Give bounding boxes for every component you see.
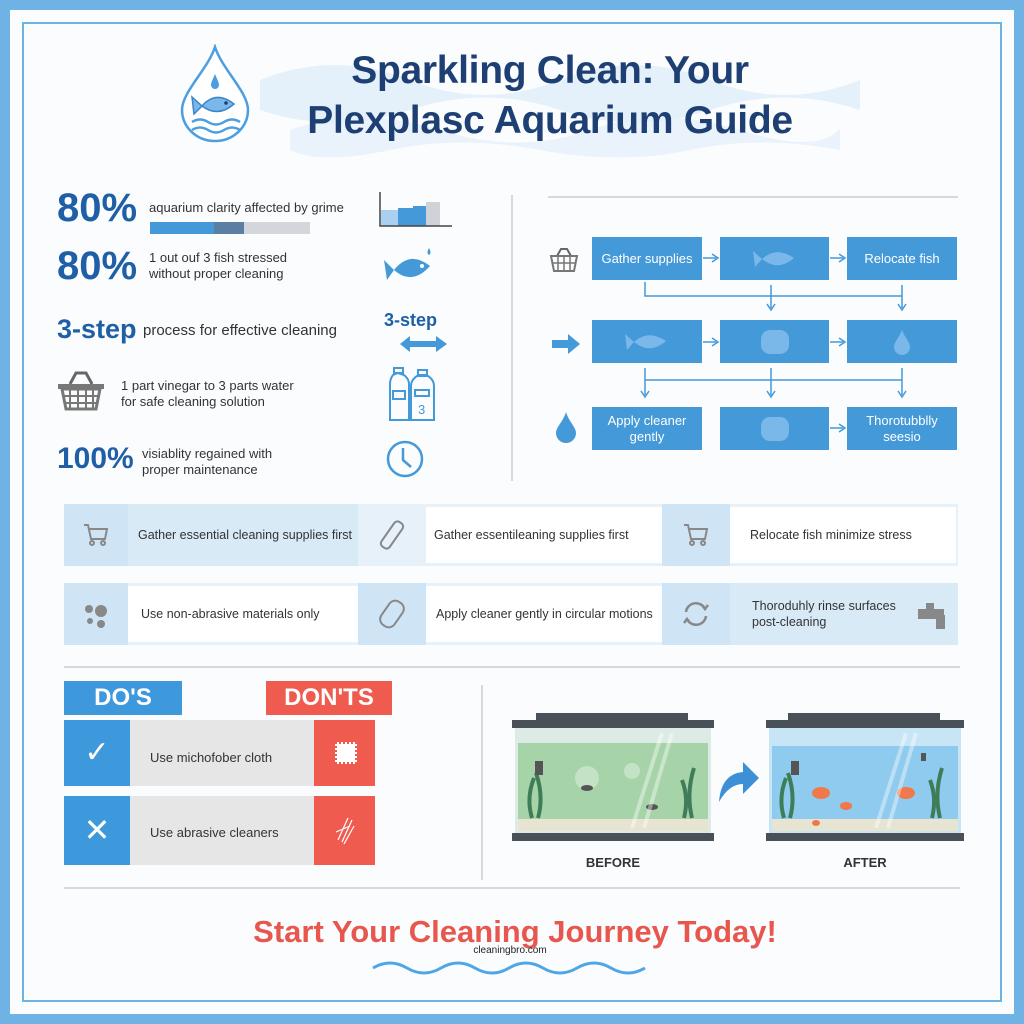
box: sponge 2 [720, 407, 829, 450]
stat: 100%: proper maintenance [142, 462, 258, 477]
panel: stats [57, 186, 344, 477]
flowchart [550, 237, 957, 450]
icon: refresh [662, 583, 730, 645]
stat: 3-step: 3-step [57, 314, 137, 344]
icon: 3-step arrow: 3-step [384, 310, 437, 330]
icon: bottles [389, 367, 435, 421]
box: gather supplies [592, 237, 702, 280]
icon: arrow [552, 334, 580, 354]
stat: 80% fish stressed [57, 244, 287, 288]
icon: fish [384, 248, 430, 280]
stat: 80% fish stressed: 80% [57, 244, 137, 288]
box: thoroughly [847, 407, 957, 450]
don'ts heading [266, 681, 392, 715]
panel: steps row 2: Thoroduhly rinse surfaces [752, 599, 896, 613]
connectors [640, 253, 907, 433]
stat: vinegar ratio: 1 part vinegar to 3 parts water [121, 378, 294, 393]
title background waves [260, 65, 860, 158]
decorative wave [372, 962, 646, 974]
panel: steps row 1: Relocate fish minimize stress [750, 528, 912, 542]
icon: dots [64, 583, 128, 645]
title: Sparkling Clean: Your [351, 49, 749, 92]
label: after: AFTER [843, 855, 887, 870]
icon: clock [386, 440, 424, 478]
icon: mini bar chart [379, 192, 452, 227]
do's heading: DO'S [94, 684, 152, 711]
box: apply cleaner: gently [630, 428, 664, 444]
stat: 100% [57, 442, 272, 477]
icon: basket [58, 372, 104, 410]
stat: 80% fish stressed: 1 out ouf 3 fish stressed [149, 250, 287, 265]
stat: 80% clarity: aquarium clarity affected by grime [149, 200, 344, 215]
box: sponge [720, 320, 829, 363]
arrow: before to after [719, 762, 759, 802]
box: gather supplies: Gather supplies [601, 250, 693, 266]
icon: sponge [358, 583, 426, 645]
icon: cart 2 [662, 504, 730, 566]
footer url: cleaningbro.com [473, 945, 547, 956]
box: drop [847, 320, 957, 363]
box: apply cleaner: Apply cleaner [608, 412, 686, 428]
row: microfiber: Use michofober cloth [150, 750, 272, 765]
stat: 80% fish stressed: without proper cleaning [149, 266, 283, 281]
after tank [766, 713, 964, 870]
panel: steps row 2: Apply cleaner gently in circular motions [436, 607, 653, 621]
box: fish [720, 237, 829, 280]
label: before: BEFORE [586, 855, 640, 870]
stat: 3-step: process for effective cleaning [143, 322, 337, 339]
stat: vinegar ratio [121, 378, 294, 409]
row: abrasive [64, 796, 375, 865]
do's heading [64, 681, 182, 715]
stat: 100%: 100% [57, 442, 134, 475]
title [307, 49, 793, 142]
box: relocate fish: Relocate fish [864, 250, 940, 266]
row: microfiber: ✓ [84, 736, 110, 769]
panel: steps row 2: Use non-abrasive materials only [141, 607, 320, 621]
title: Plexplasc Aquarium Guide [307, 99, 793, 142]
stat: 80% clarity: 80% [57, 186, 137, 230]
row: abrasive: ✕ [84, 812, 110, 848]
icon: water drop with fish [180, 44, 250, 142]
stat: 80% clarity [57, 186, 344, 234]
stat: vinegar ratio: for safe cleaning solution [121, 394, 265, 409]
box: apply cleaner [592, 407, 702, 450]
panel: steps row 1: Gather essentileaning supplies first [434, 528, 629, 542]
stat: 3-step [57, 314, 337, 344]
row: microfiber [64, 720, 375, 786]
stat: 100%: visiablity regained with [142, 446, 272, 461]
box: fish 2 [592, 320, 702, 363]
box: relocate fish [847, 237, 957, 280]
icon: basket small [550, 248, 578, 272]
icon: faucet [918, 603, 945, 629]
before tank [512, 713, 714, 870]
panel: steps row 1 [64, 504, 958, 566]
row: abrasive: Use abrasive cleaners [150, 825, 279, 840]
panel: steps row 2: post-cleaning [752, 615, 826, 629]
icon: cart [64, 504, 128, 566]
icon: bottles: 3 [418, 402, 425, 417]
don'ts heading: DON'TS [284, 684, 374, 711]
panel: steps row 2 [64, 583, 958, 645]
icon: scraper [380, 520, 404, 550]
call to action: Start Your Cleaning Journey Today! [253, 914, 777, 949]
icon: 3-step arrow [384, 310, 447, 352]
icon: drop [556, 412, 576, 443]
box: thoroughly: seesio [883, 428, 921, 444]
panel: steps row 1: Gather essential cleaning supplies first [138, 528, 352, 542]
box: thoroughly: Thorotubblly [866, 412, 938, 428]
